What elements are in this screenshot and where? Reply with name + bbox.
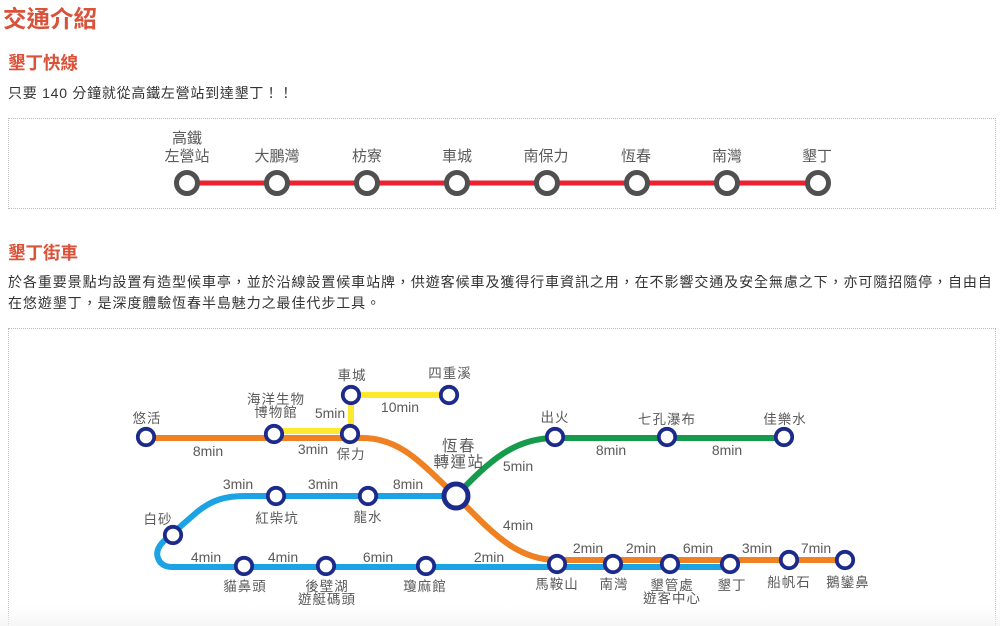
station labels: 佳樂水 (763, 411, 807, 427)
text: street bus description (8, 274, 993, 311)
express station labels: 大鵬灣 (254, 148, 300, 165)
travel time labels: 3min (742, 540, 772, 556)
travel time labels: 4min (191, 549, 221, 565)
express station labels: 高鐵 (172, 130, 202, 147)
title: 交通介紹 (3, 6, 97, 32)
travel time labels: 5min (315, 405, 345, 421)
station labels: 船帆石 (767, 575, 811, 590)
heading: street bus: 墾丁街車 (8, 243, 78, 263)
station labels: 鵝鑾鼻 (826, 574, 870, 590)
hub label (433, 437, 485, 471)
station labels: 貓鼻頭 (223, 578, 267, 594)
station labels: 龍水 (354, 509, 382, 525)
travel time labels: 3min (308, 476, 338, 492)
panel: express line frame (8, 118, 996, 209)
express station labels: 車城 (442, 148, 472, 165)
travel time labels: 2min (474, 549, 504, 565)
station labels: 遊艇碼頭 (298, 592, 356, 607)
travel time labels: 8min (393, 476, 423, 492)
express route line (187, 180, 817, 186)
hub label: 轉運站 (433, 453, 485, 471)
bottom fade (0, 606, 1000, 626)
station labels: 車城 (338, 368, 366, 383)
travel time labels: 5min (503, 458, 533, 474)
station labels: 四重溪 (428, 366, 472, 381)
travel time labels: 8min (193, 443, 223, 459)
travel time labels: 8min (712, 442, 742, 458)
travel time labels: 7min (801, 540, 831, 556)
travel time labels: 2min (573, 540, 603, 556)
station labels: 墾管處 (650, 577, 694, 593)
travel time labels: 4min (268, 549, 298, 565)
station labels: 遊客中心 (643, 590, 701, 606)
express station labels (164, 130, 832, 165)
stations (138, 387, 853, 574)
hub label: 恆春 (442, 437, 476, 455)
travel time labels (191, 399, 831, 565)
express station labels: 南保力 (523, 148, 569, 165)
station labels: 博物館 (254, 404, 298, 420)
station labels: 海洋生物 (247, 392, 305, 407)
express stations (176, 172, 828, 194)
travel time labels: 3min (298, 441, 328, 457)
text: street bus description: 在悠遊墾丁，是深度體驗恆春半島魅力之最佳代步工具。 (8, 295, 381, 311)
station labels: 七孔瀑布 (638, 412, 696, 427)
express station labels: 左營站 (164, 148, 210, 165)
station labels: 後壁湖 (305, 579, 349, 594)
travel time labels: 8min (596, 442, 626, 458)
station labels: 瓊麻館 (403, 579, 447, 594)
travel time labels: 2min (626, 540, 656, 556)
station labels (132, 366, 870, 607)
panel: street bus frame (8, 328, 996, 626)
travel time labels: 6min (363, 549, 393, 565)
text: street bus description: 於各重要景點均設置有造型候車亭，並於沿線設置候車站牌，供遊客候車及獲得行車資訊之用，在不影響交通及安全無慮之下，亦可隨招隨停，自由自 (8, 274, 993, 290)
express station labels: 枋寮 (352, 147, 382, 165)
express station labels: 恆春 (621, 148, 651, 165)
station labels: 墾丁 (718, 577, 746, 593)
text: express description: 只要 140 分鐘就從高鐵左營站到達墾丁！！ (8, 85, 294, 101)
orange route (146, 438, 845, 560)
station labels: 出火 (540, 410, 570, 425)
blue route (157, 496, 730, 567)
station labels: 白砂 (144, 512, 172, 527)
yellow route (274, 395, 449, 431)
green route (456, 438, 784, 496)
express station labels: 南灣 (712, 148, 742, 165)
travel time labels: 3min (223, 476, 253, 492)
station labels: 悠活 (132, 411, 162, 426)
travel time labels: 4min (503, 517, 533, 533)
heading: express line: 墾丁快線 (8, 53, 78, 73)
station labels: 南灣 (600, 577, 628, 592)
station labels: 馬鞍山 (535, 577, 579, 592)
travel time labels: 10min (381, 399, 419, 415)
station labels: 保力 (336, 447, 366, 462)
express station labels: 墾丁 (802, 147, 832, 165)
travel time labels: 6min (683, 540, 713, 556)
station labels: 紅柴坑 (255, 511, 299, 526)
